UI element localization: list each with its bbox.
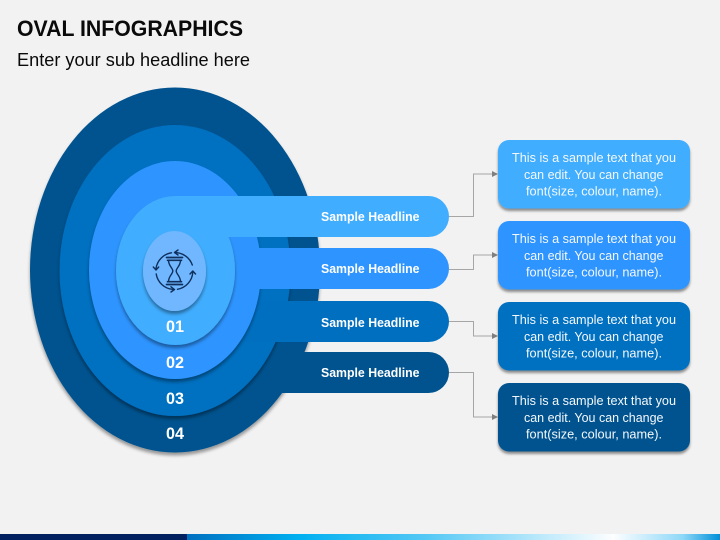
text box 4: font(size, colour, name). — [526, 426, 662, 442]
oval layer 01 — [116, 196, 235, 345]
subtitle: Enter your sub headline here — [17, 50, 250, 70]
footer bar — [0, 534, 720, 540]
arrow connector 1 — [449, 171, 498, 216]
bar 03 — [175, 301, 449, 342]
oval layer 03 — [60, 125, 290, 416]
bar 01 — [175, 196, 449, 237]
number 02: 02 — [166, 354, 184, 372]
text box 4 — [498, 383, 690, 452]
arrow connector 4 — [449, 372, 498, 420]
text box 2: font(size, colour, name). — [526, 264, 662, 280]
title: OVAL INFOGRAPHICS — [17, 16, 243, 41]
headline 1: Sample Headline — [321, 210, 420, 224]
text box 2: can edit. You can change — [524, 248, 664, 263]
bar 02 — [175, 248, 449, 289]
headline 4: Sample Headline — [321, 366, 420, 380]
text box 1: This is a sample text that you — [512, 150, 676, 165]
bar 04 — [175, 352, 449, 393]
text box 2: This is a sample text that you — [512, 231, 676, 246]
oval layer 02 — [89, 161, 261, 379]
number 03: 03 — [166, 390, 184, 408]
oval layer 04 — [30, 88, 320, 452]
inner oval — [143, 231, 206, 311]
text box 1: font(size, colour, name). — [526, 184, 662, 198]
text box 3 — [498, 302, 690, 370]
number 04: 04 — [166, 425, 185, 443]
text box 3: This is a sample text that you — [512, 312, 676, 327]
number 01: 01 — [166, 318, 184, 336]
text box 3: can edit. You can change — [524, 329, 664, 344]
icon: hourglass with cycle arrows — [153, 250, 196, 292]
oval diagram — [30, 88, 449, 452]
text box 1: can edit. You can change — [524, 167, 664, 182]
text box 3: font(size, colour, name). — [526, 346, 662, 360]
text box 4: This is a sample text that you — [512, 393, 676, 408]
text box 2 — [498, 221, 690, 290]
text box 1 — [498, 140, 690, 208]
arrow connector 2 — [449, 252, 498, 270]
arrow connector 3 — [449, 322, 498, 339]
text box 4: can edit. You can change — [524, 410, 664, 425]
headline 2: Sample Headline — [321, 262, 420, 276]
headline 3: Sample Headline — [321, 316, 420, 330]
